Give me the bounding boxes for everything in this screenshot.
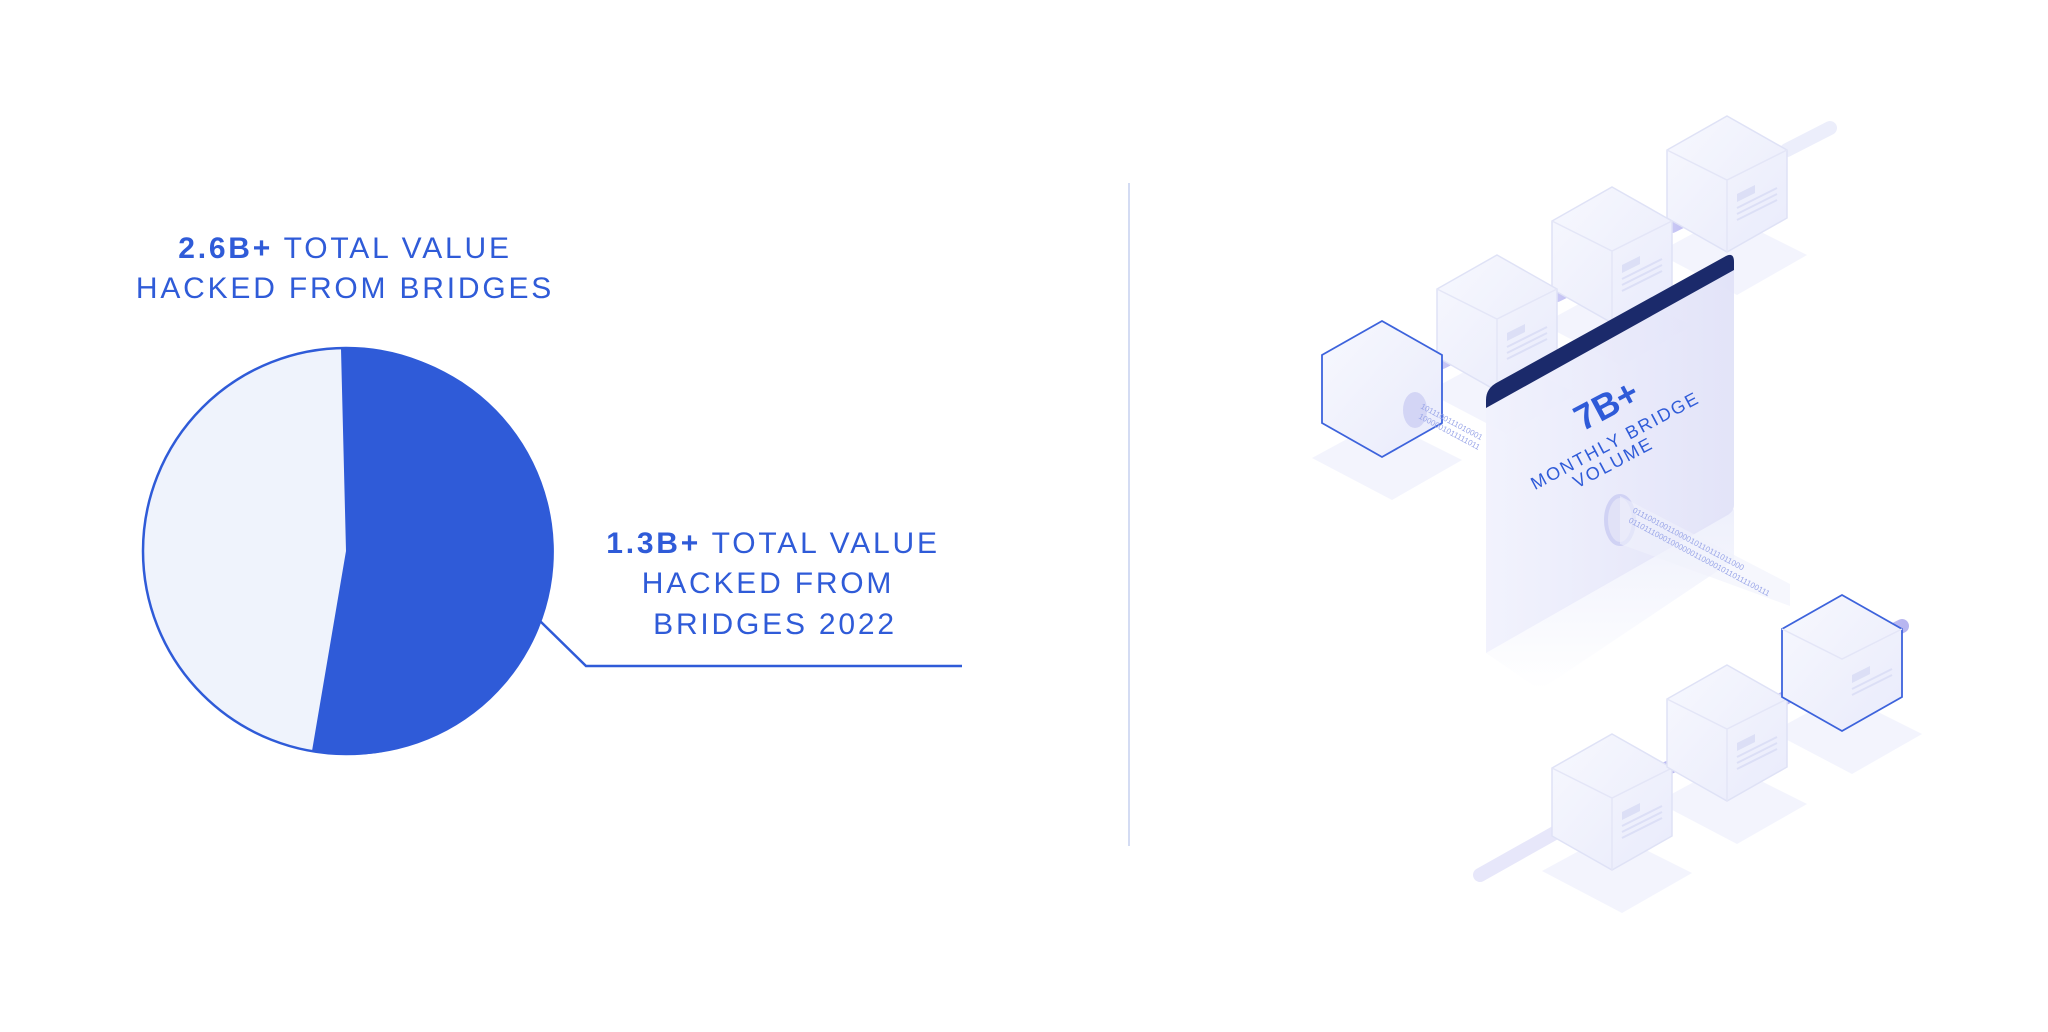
heading: total value hacked — [136, 232, 554, 305]
panel: 7B+ monthly bridge volume: MONTHLY BRIDGE — [1527, 388, 1703, 494]
panel: 7B+ monthly bridge volume: 7B+ — [1567, 371, 1645, 439]
callout text: 2022 hacks — [606, 527, 940, 641]
callout text: 2022 hacks: HACKED FROM — [642, 567, 894, 600]
panel: 7B+ monthly bridge volume: 01110010011000010110111011000 — [1631, 506, 1746, 573]
heading: total value hacked: 2.6B+ TOTAL VALUE — [178, 232, 512, 265]
cube E highlighted — [1782, 595, 1902, 731]
cubes top row — [1667, 116, 1787, 252]
pie chart — [143, 348, 554, 755]
shadows — [1312, 215, 1922, 913]
callout leader line — [539, 620, 962, 666]
panel: 7B+ monthly bridge volume: 0110111000100000011000010110111100111 — [1627, 516, 1772, 599]
panel: 7B+ monthly bridge volume — [1486, 255, 1790, 653]
divider — [1128, 183, 1130, 846]
callout text: 2022 hacks: 1.3B+ TOTAL VALUE — [606, 527, 940, 560]
heading: total value hacked: HACKED FROM BRIDGES — [136, 272, 554, 305]
cube A highlighted — [1322, 321, 1442, 457]
panel: 7B+ monthly bridge volume: VOLUME — [1570, 433, 1657, 492]
pipes — [1442, 128, 1902, 875]
data binary stream: 1011100111010001 — [1419, 402, 1485, 442]
illustration: bridge blockchain — [1312, 116, 1922, 913]
callout text: 2022 hacks: BRIDGES 2022 — [653, 608, 897, 641]
data binary stream: 1000001011111011 — [1417, 412, 1482, 452]
cubes bottom row — [1552, 734, 1672, 870]
